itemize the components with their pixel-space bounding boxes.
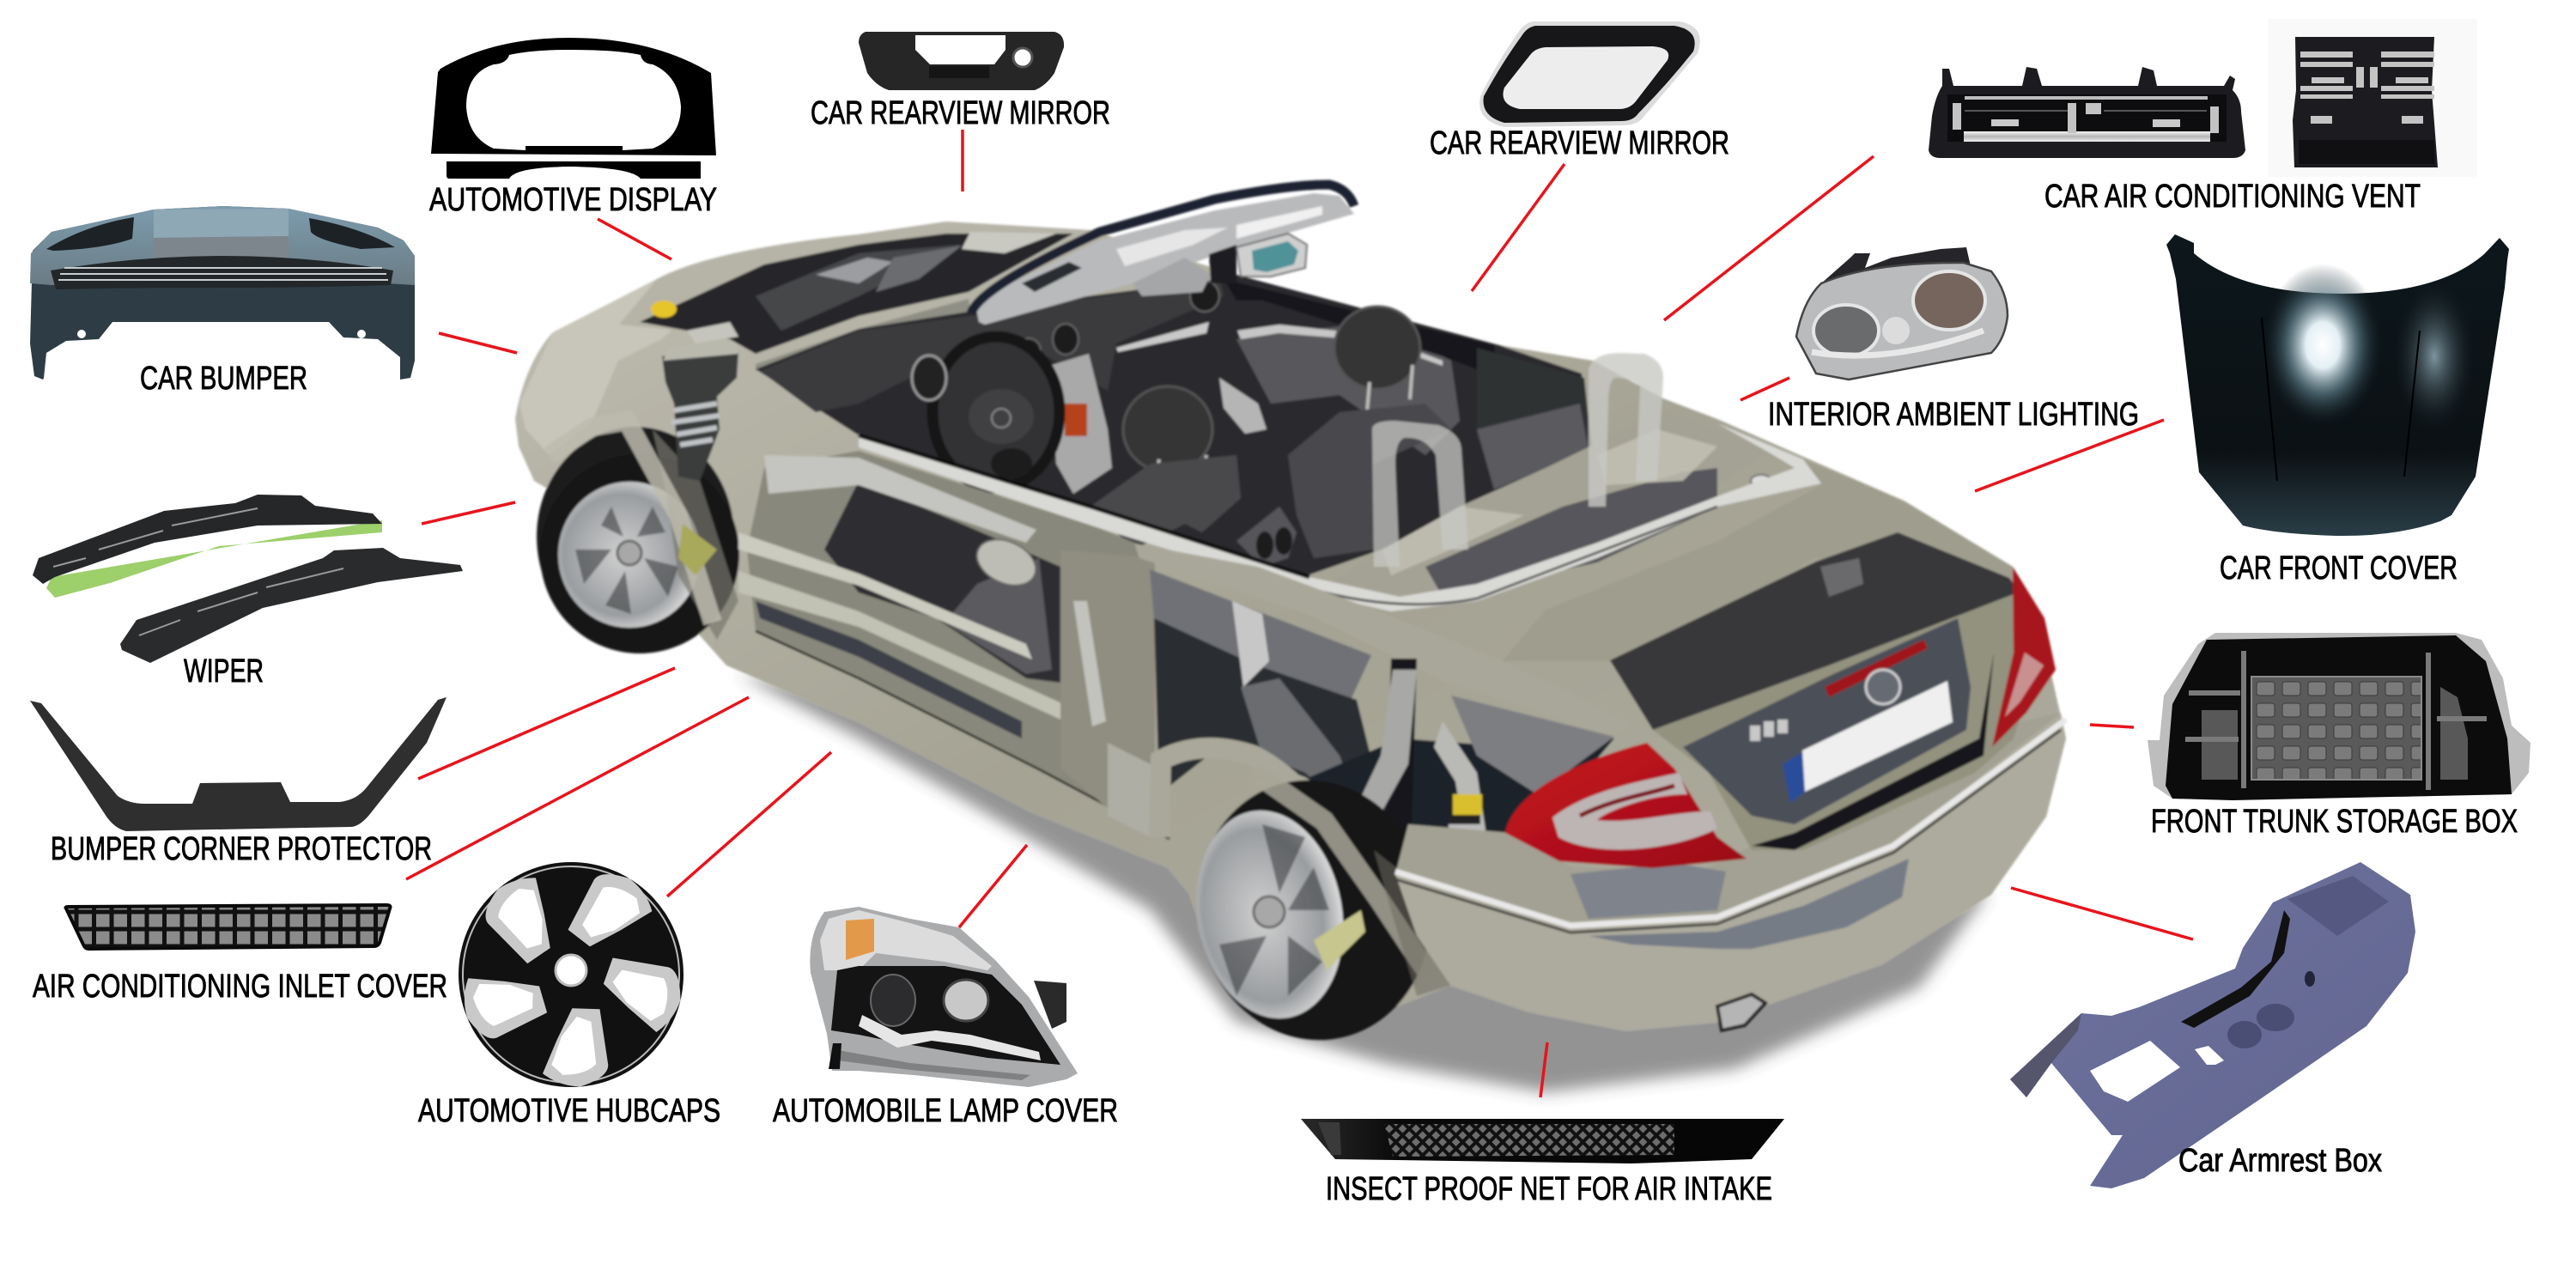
translucent rear fender band — [1253, 771, 1428, 973]
plate white — [1802, 681, 1953, 792]
beam one — [738, 532, 1032, 659]
icon: handle bezel — [859, 32, 1064, 90]
rear side grey wedge — [1241, 678, 1365, 824]
beige deck patch right — [1597, 429, 1717, 485]
icon: bumper — [30, 206, 415, 380]
car body — [515, 222, 2066, 1039]
trunk deck — [1502, 423, 2044, 661]
exhaust — [1717, 994, 1765, 1030]
panel: automobile lamp cover — [773, 907, 1118, 1129]
translucent front fender band — [550, 421, 713, 623]
label: AUTOMOBILE LAMP COVER — [773, 1093, 1118, 1129]
rear quarter dark — [1154, 618, 1391, 837]
plate blue — [1783, 752, 1805, 803]
beam two — [738, 571, 1139, 756]
cabin dark — [756, 275, 1593, 575]
rear right arm — [1434, 721, 1490, 859]
panel: insect proof net — [1301, 1119, 1784, 1207]
icon: hood — [2166, 234, 2509, 536]
panel: automotive hubcaps — [418, 862, 720, 1129]
hinge bracket — [1232, 601, 1269, 687]
arrow: lamp cover — [959, 845, 1027, 927]
arrow: display — [598, 219, 671, 259]
front fender highlight — [519, 258, 756, 455]
tonneau panel — [1314, 410, 1769, 601]
arrow: rearview two — [1472, 164, 1564, 291]
right tail light — [1992, 567, 2056, 747]
label: CAR REARVIEW MIRROR — [811, 95, 1110, 131]
rear vents — [1236, 507, 1297, 567]
high stop lamp — [1825, 640, 1928, 697]
dark beltline — [859, 435, 1309, 577]
panel: car rearview mirror one — [811, 32, 1110, 131]
rim spokes — [575, 507, 678, 614]
rear quarter light grey — [1150, 569, 1371, 698]
rear panel dark — [1683, 618, 1971, 824]
label: CAR AIR CONDITIONING VENT — [2044, 179, 2421, 215]
icon: lamp — [1796, 247, 2008, 380]
icon: wide vent — [1929, 67, 2245, 158]
khaki beltline band — [1134, 544, 1631, 736]
arrow: ambient lighting — [1741, 378, 1789, 400]
arrow: rearview one — [961, 130, 964, 191]
label: AUTOMOTIVE HUBCAPS — [418, 1093, 720, 1129]
label: CAR BUMPER — [140, 361, 307, 397]
icon: grille — [65, 905, 390, 949]
icon: rear vent — [2268, 19, 2477, 177]
star emblem — [1866, 670, 1900, 704]
panel: car bumper — [30, 206, 415, 397]
brake part — [1314, 910, 1365, 970]
door trim chrome — [1237, 325, 1443, 366]
icon: hubcap — [449, 862, 683, 1097]
icon: wiper blades — [33, 495, 463, 663]
bumper chrome shadow — [1395, 730, 2061, 933]
front wheel — [537, 427, 739, 653]
mechanism dark — [1425, 468, 1717, 597]
rear arch band — [1159, 748, 1352, 859]
B pillar tan — [1060, 550, 1155, 837]
door tone — [747, 451, 1170, 839]
arrow: inlet cover — [406, 697, 749, 879]
rear pleated panel — [1477, 404, 1589, 489]
rear headrest — [1334, 307, 1420, 412]
icon: display frame — [431, 38, 716, 179]
hood surface — [619, 222, 1091, 369]
seat grey — [945, 558, 1052, 674]
rear grey panel — [1451, 696, 1614, 794]
trim lower dark — [1752, 653, 1994, 850]
instrument cluster — [912, 355, 946, 400]
translucent tire cover — [653, 429, 738, 640]
icon: mirror frame — [1479, 21, 1700, 127]
passenger door panel — [1236, 322, 1460, 455]
panel: automotive display — [429, 38, 717, 218]
icon: headlamp — [810, 907, 1078, 1087]
silver arm — [1348, 670, 1417, 841]
label: INTERIOR AMBIENT LIGHTING — [1768, 397, 2139, 433]
console display — [1065, 404, 1087, 436]
label: BUMPER CORNER PROTECTOR — [51, 831, 432, 867]
panel: wiper — [33, 495, 463, 690]
fuel pump — [1447, 794, 1485, 876]
arrow: wiper — [422, 502, 515, 524]
icon: net — [1301, 1119, 1784, 1163]
car model badge — [1750, 720, 1788, 741]
arrow: trunk box — [2090, 725, 2134, 727]
trunk hinge — [1820, 558, 1863, 597]
label: WIPER — [184, 653, 264, 690]
chrome rail — [859, 423, 1821, 611]
trunk well — [1610, 532, 2020, 730]
label: INSECT PROOF NET FOR AIR INTAKE — [1326, 1171, 1772, 1207]
panel: car front cover — [2166, 234, 2509, 586]
icon: armrest — [2010, 862, 2415, 1188]
glovebox trim — [1116, 322, 1209, 352]
icon: storage box — [2148, 633, 2530, 800]
blue grey insert left — [1571, 863, 1726, 919]
A pillar — [1209, 245, 1236, 283]
bumper chrome — [1395, 720, 2066, 926]
front headrest — [1123, 386, 1212, 494]
rear structure dark — [1309, 738, 1614, 893]
rear bumper — [1395, 713, 2066, 1030]
rear tire cover — [1374, 850, 1451, 996]
panel: interior ambient lighting — [1768, 247, 2139, 433]
arrow: insect net — [1540, 1042, 1547, 1097]
blue insert lower left — [1589, 932, 1717, 949]
quarter under light — [1395, 713, 2061, 926]
front seat base — [1091, 455, 1241, 550]
wheel arch — [537, 427, 734, 647]
door handle — [969, 531, 1043, 594]
car illustration — [515, 185, 2066, 1092]
car shadow — [738, 674, 1988, 1092]
panel: bumper corner protector — [30, 697, 447, 867]
beige deck patch — [1382, 507, 1524, 575]
B pillar strut — [1073, 601, 1106, 726]
engine cover highlights — [651, 232, 1056, 371]
icon: corner protector — [30, 697, 447, 831]
dash vents — [1017, 281, 1219, 362]
arrow: front cover — [1975, 420, 2164, 491]
label: CAR REARVIEW MIRROR — [1430, 125, 1729, 161]
arrow: AC vent — [1664, 156, 1874, 320]
label: CAR FRONT COVER — [2220, 550, 2458, 586]
windshield frame — [971, 185, 1354, 325]
deck medallion — [1751, 475, 1771, 487]
blue insert lower — [1717, 859, 1909, 949]
arrow: hubcap — [667, 752, 831, 896]
passenger dash switch — [1219, 378, 1267, 434]
rear wheel tire — [1173, 758, 1455, 1062]
steering wheel — [933, 337, 1060, 488]
panel: car armrest box — [2010, 862, 2415, 1188]
door gap line — [756, 631, 1170, 839]
panel: air conditioning inlet cover — [33, 905, 447, 1005]
top door rail — [764, 455, 1036, 543]
strut — [1382, 659, 1417, 936]
center console — [1052, 354, 1112, 494]
side mirror — [1236, 234, 1307, 276]
rim — [558, 482, 701, 628]
door window line — [1224, 279, 1498, 378]
door edge lights — [1108, 743, 1151, 837]
label: AUTOMOTIVE DISPLAY — [429, 182, 717, 218]
roll bar right — [1589, 353, 1663, 507]
right tail light silver — [2005, 653, 2044, 717]
panel: car air conditioning vent — [1929, 19, 2477, 215]
rear wheel rim — [1181, 799, 1365, 1030]
label: AIR CONDITIONING INLET COVER — [33, 969, 447, 1005]
engine bay — [640, 234, 1073, 354]
lower dark strip — [756, 601, 1022, 738]
trunk lid rear — [1653, 592, 2044, 850]
tire — [540, 454, 739, 653]
roll bar left — [1372, 421, 1468, 567]
arrow: armrest — [2011, 888, 2193, 939]
panel: car rearview mirror two — [1430, 21, 1729, 161]
left tail light — [1505, 743, 1747, 868]
arrow: corner protector — [418, 668, 675, 779]
door interior dark — [824, 481, 1060, 683]
label: Car Armrest Box — [2178, 1143, 2382, 1179]
front suspension spring — [662, 339, 738, 575]
arrow: bumper — [439, 333, 517, 353]
panel: front trunk storage box — [2148, 633, 2530, 840]
rear seat base — [1288, 404, 1451, 558]
dashboard top — [760, 279, 1224, 412]
rail shadow line — [1308, 507, 1717, 605]
rear dark panel — [1477, 348, 1593, 489]
